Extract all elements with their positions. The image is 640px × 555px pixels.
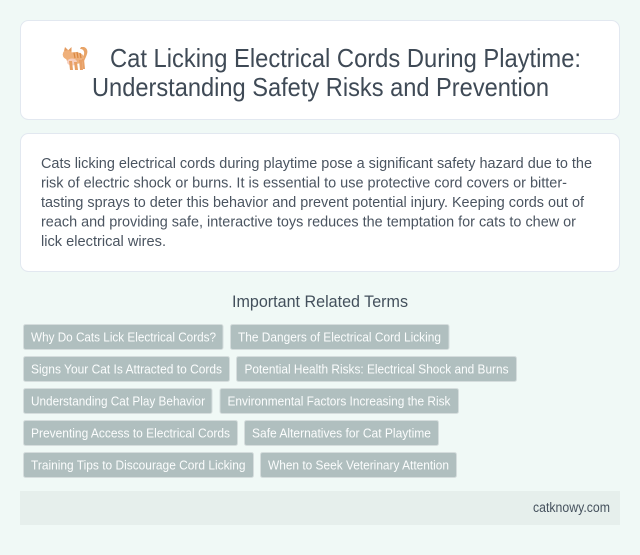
summary paragraph: risk of electric shock or burns. It is essential to use protective cord covers or bitter- <box>41 174 567 192</box>
summary paragraph <box>41 155 592 250</box>
tag: When to Seek Veterinary Attention <box>268 458 449 472</box>
tag <box>230 324 449 350</box>
tag: Safe Alternatives for Cat Playtime <box>252 426 431 440</box>
tag <box>236 356 516 382</box>
tag: Why Do Cats Lick Electrical Cords? <box>31 330 216 344</box>
summary paragraph: Cats licking electrical cords during playtime pose a significant safety hazard due to the <box>41 155 592 172</box>
tag <box>24 388 212 414</box>
summary paragraph: tasting sprays to deter this behavior and prevent potential injury. Keeping cords out of <box>41 194 585 211</box>
tag: Training Tips to Discourage Cord Licking <box>31 458 246 472</box>
tag <box>244 420 438 446</box>
tag: Understanding Cat Play Behavior <box>31 394 206 408</box>
title: Cat Licking Electrical Cords During Playtime: <box>110 43 581 73</box>
summary paragraph: lick electrical wires. <box>41 233 166 250</box>
tag <box>260 452 456 478</box>
tag <box>24 452 254 478</box>
title: Understanding Safety Risks and Prevention <box>92 72 549 102</box>
tag: Potential Health Risks: Electrical Shock and Burns <box>244 362 509 376</box>
tag: Preventing Access to Electrical Cords <box>31 426 230 440</box>
tag: The Dangers of Electrical Cord Licking <box>238 330 441 344</box>
tag <box>220 388 458 414</box>
tag: Environmental Factors Increasing the Risk <box>228 394 451 408</box>
tag <box>24 356 230 382</box>
panel: summary card <box>20 134 620 272</box>
tag <box>24 324 223 350</box>
tag: Signs Your Cat Is Attracted to Cords <box>31 362 222 376</box>
title <box>92 43 581 102</box>
summary paragraph: reach and providing safe, interactive toys reduces the temptation for cats to chew or <box>41 214 576 230</box>
heading: related terms: Important Related Terms <box>232 293 408 311</box>
footer bar <box>20 491 620 525</box>
tag list <box>24 324 516 478</box>
footer: site name: catknowy.com <box>533 500 610 515</box>
icon: orange cat <box>63 47 87 70</box>
panel: title card <box>20 20 620 120</box>
tag <box>24 420 238 446</box>
